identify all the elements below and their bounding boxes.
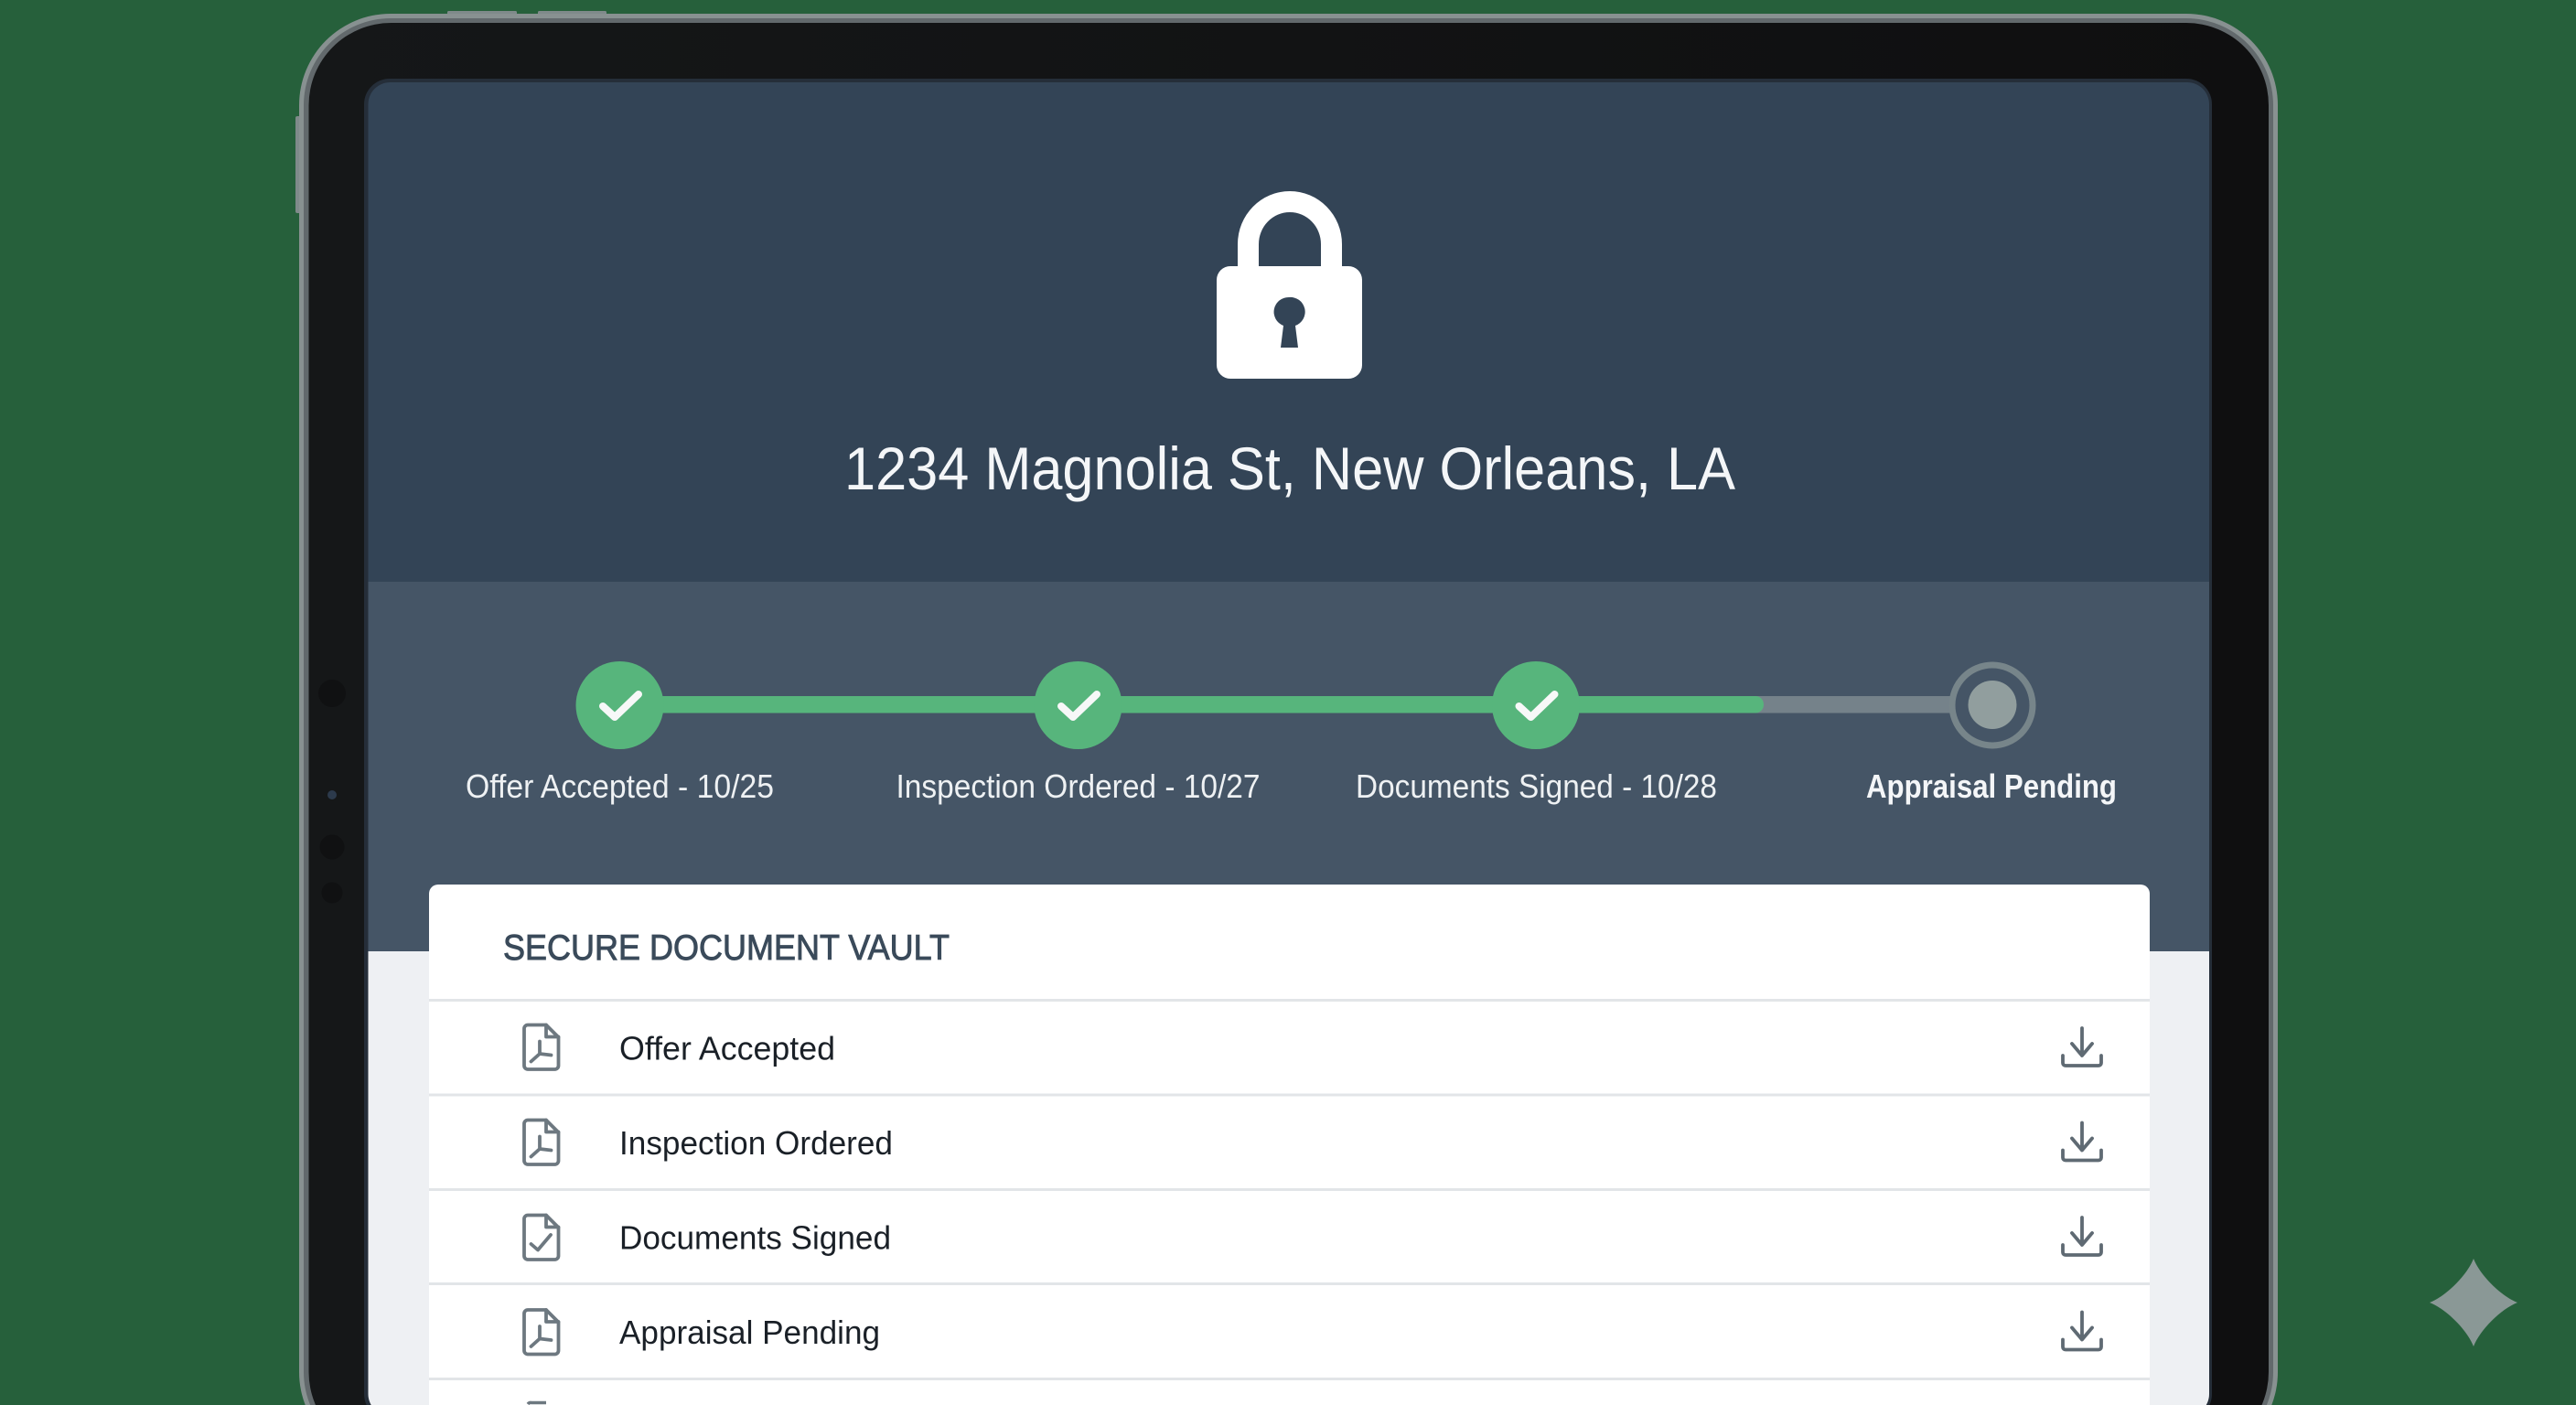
step 2: inspection ordered: Inspection Ordered - 10/27 xyxy=(896,767,1261,805)
step 1: offer accepted: Offer Accepted - 10/25 xyxy=(466,767,774,805)
screen xyxy=(368,82,2210,1405)
icon: pdf file xyxy=(524,1024,558,1069)
row: inspection ordered xyxy=(524,1120,2101,1164)
top hardware buttons xyxy=(447,11,606,17)
step 1: offer accepted xyxy=(466,661,774,805)
step 3: documents signed xyxy=(1356,661,1717,805)
icon: signed file xyxy=(524,1215,558,1260)
title: property address: 1234 Magnolia St, New Orleans, LA xyxy=(844,434,1735,502)
icon: sparkle watermark xyxy=(2430,1259,2517,1346)
row: appraisal pending: Appraisal Pending xyxy=(619,1314,880,1351)
step 4: appraisal pending: Appraisal Pending xyxy=(1866,767,2117,805)
screen edge xyxy=(364,79,2212,1405)
pending track xyxy=(1738,696,1958,713)
row: offer accepted xyxy=(524,1024,2101,1069)
icon: download xyxy=(2063,1123,2101,1160)
row: documents signed: Documents Signed xyxy=(619,1218,891,1257)
icon: pdf file xyxy=(524,1310,558,1354)
tablet device xyxy=(295,11,2278,1405)
row: documents signed xyxy=(524,1215,2101,1260)
step 4: appraisal pending xyxy=(1866,665,2117,805)
metal frame xyxy=(299,14,2278,1405)
icon: pdf file xyxy=(524,1120,558,1164)
black bezel xyxy=(309,23,2269,1405)
icon: download xyxy=(2063,1217,2101,1255)
step 2: inspection ordered xyxy=(896,661,1261,805)
panel: dark header xyxy=(368,82,2210,582)
card heading: SECURE DOCUMENT VAULT xyxy=(503,928,950,968)
row: appraisal pending xyxy=(524,1310,2101,1354)
row: inspection ordered: Inspection Ordered xyxy=(619,1124,893,1162)
row dividers xyxy=(429,999,2150,1380)
row: offer accepted: Offer Accepted xyxy=(619,1030,835,1067)
panel: secure document vault card xyxy=(429,885,2150,1405)
completed track xyxy=(619,696,1764,713)
icon: padlock xyxy=(1217,191,1362,379)
icon: partial file in cut-off row xyxy=(528,1402,546,1404)
panel: progress band xyxy=(368,582,2210,951)
progress stepper xyxy=(466,661,2117,805)
side hardware button xyxy=(295,116,302,213)
icon: download xyxy=(2063,1312,2101,1350)
camera array xyxy=(318,680,346,904)
icon: download xyxy=(2063,1028,2101,1066)
panel: light lower area xyxy=(368,951,2210,1405)
step 3: documents signed: Documents Signed - 10/28 xyxy=(1356,767,1717,805)
